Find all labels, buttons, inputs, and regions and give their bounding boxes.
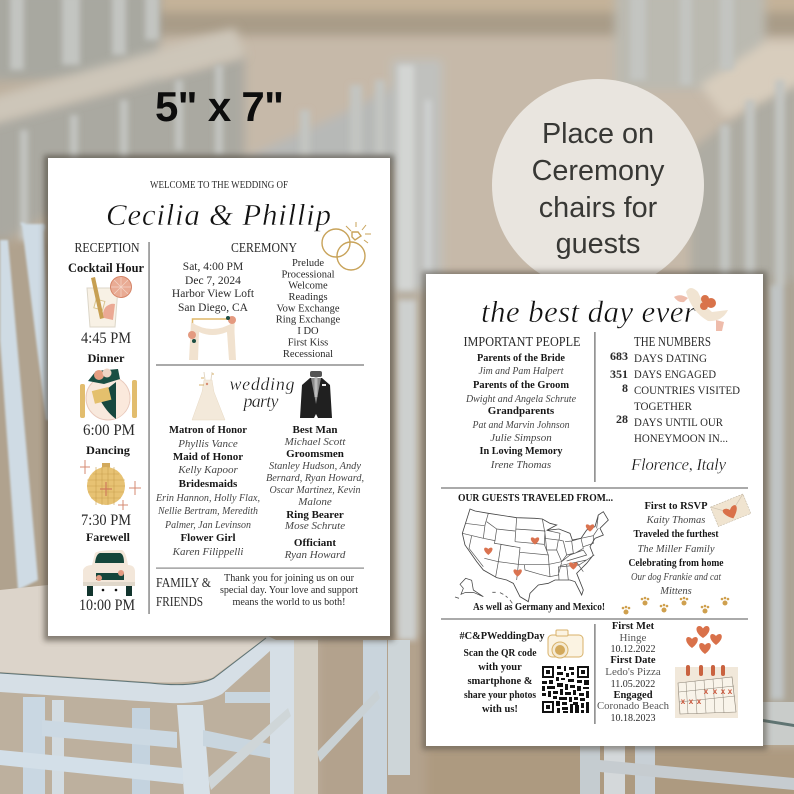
column: ceremony: Vow Exchange [276,304,340,314]
section: photo sharing [460,630,590,715]
icon: hearts and calendar: x [697,697,702,706]
column: ceremony: CEREMONY [231,241,297,256]
icon: camera [548,630,583,658]
callout: place on ceremony chairs: Ceremony [532,155,665,187]
column: love story dates: Hinge [620,632,647,644]
icon: getaway car [83,550,135,596]
QR code [541,665,590,714]
column: love story dates: 10.12.2022 [610,644,656,655]
divider [156,568,364,569]
section: wedding party: Nellie Bertram, Meredith [157,505,258,517]
icon: hearts and calendar: x [704,687,709,696]
column: love story dates: Coronado Beach [597,700,669,712]
column: important people [464,335,580,471]
couple names in script: Cecilia & Phillip [106,197,331,232]
column: the numbers: HONEYMOON IN... [634,431,728,445]
section: wedding party: Ring Bearer [286,509,344,521]
column: ceremony: Harbor View Loft [172,288,255,300]
section: wedding party [155,371,364,561]
icon: envelope [710,494,751,527]
section: wedding party: Officiant [294,537,336,549]
section: wedding party: Bridesmaids [179,478,238,490]
divider [441,618,748,620]
icon: dinner plate [80,368,137,420]
section: guest superlatives: Mittens [659,586,692,597]
column: reception timeline: 4:45 PM [81,330,131,347]
column: the numbers: DAYS DATING [634,351,707,365]
icon: tuxedo [300,371,332,418]
section: wedding party: Bernard, Ryan Howard, [266,472,364,484]
section: photo sharing: Scan the QR code [464,648,537,659]
column: ceremony: Prelude [292,258,324,269]
column: the numbers: 351 [610,367,628,381]
column: ceremony: Processional [281,270,335,280]
section: wedding party: Kelly Kapoor [177,464,239,476]
column: love story dates [597,621,669,724]
section: guest superlatives: Our dog Frankie and cat [631,572,722,583]
section: guest superlatives: Kaity Thomas [646,515,705,526]
icon: hearts and calendar [675,626,738,718]
column: love story dates: 11.05.2022 [611,679,655,690]
section: guests map [455,493,613,613]
column: ceremony: Recessional [283,349,333,360]
welcome line: WELCOME TO THE WEDDING OF [150,180,288,191]
column: reception timeline: Farewell [86,530,131,544]
section: wedding party: Best Man [293,424,337,436]
section: guest superlatives: Celebrating from home [628,558,724,569]
column: love story dates: Engaged [613,690,653,701]
section: wedding party: party [242,391,278,411]
section: family and friends: FAMILY & [156,576,211,591]
icon: wedding arch [188,316,236,360]
section: family and friends [156,573,358,610]
section: wedding party: Stanley Hudson, Andy [269,460,361,472]
section: family and friends: FRIENDS [156,595,203,610]
callout: place on ceremony chairs: chairs for [539,192,658,224]
section: wedding party: Oscar Martinez, Kevin [270,484,361,496]
section: photo sharing: smartphone & [467,676,533,687]
column: ceremony: San Diego, CA [178,302,249,314]
section: wedding party: Ryan Howard [284,549,346,561]
icon: hearts and calendar: x [713,687,718,696]
vertical divider [594,624,596,724]
column: ceremony: Welcome [288,280,328,292]
column: the numbers: TOGETHER [634,399,692,413]
column: love story dates: Ledo's Pizza [605,666,661,678]
column: the numbers: DAYS UNTIL OUR [634,415,723,429]
section: guest superlatives: Traveled the furthest [634,529,719,540]
panel: left program card [44,155,394,641]
column: ceremony: Ring Exchange [276,314,341,326]
divider [156,364,364,366]
section: photo sharing: with your [478,662,522,673]
section: family and friends: Thank you for joining us on our [224,573,354,584]
column: important people: Julie Simpson [490,432,552,444]
callout: place on ceremony chairs [492,79,704,291]
icons: paw prints [622,597,729,614]
column: the numbers: DAYS ENGAGED [634,367,716,381]
column: important people: Pat and Marvin Johnson [472,419,570,431]
icon: hearts and calendar: x [689,697,694,706]
section: wedding party: Phyllis Vance [177,438,238,450]
column: important people: In Loving Memory [480,445,563,457]
column: ceremony [172,222,371,360]
script: destination: Florence, Italy [630,455,726,474]
script: wedding party: wedding [230,374,294,394]
section: wedding party: Mose Schrute [284,520,345,532]
column: ceremony: First Kiss [288,338,328,348]
column: important people: Jim and Pam Halpert [478,365,564,377]
section: photo sharing: with us! [482,704,518,715]
section: guest superlatives [622,494,751,614]
column: love story dates: First Met [612,621,655,632]
callout: place on ceremony chairs: Place on [542,118,654,150]
section: photo sharing: #C&PWeddingDay [460,630,545,642]
section: family and friends: special day. Your love and support [220,585,358,596]
column: the numbers: 683 [610,349,628,363]
section: wedding party: Palmer, Jan Levinson [164,519,251,531]
section: wedding party: Maid of Honor [173,451,243,463]
column: love story dates: First Date [610,655,656,666]
column: the numbers [610,335,740,474]
section: guests map: OUR GUESTS TRAVELED FROM... [458,493,613,504]
icon: cocktail [87,276,132,327]
column: reception timeline: 10:00 PM [79,597,135,614]
section: wedding party: Matron of Honor [169,424,247,436]
section: wedding party: Karen Filippelli [172,546,243,558]
script title: the best day ever [481,294,697,329]
section: guests map: As well as Germany and Mexico! [473,602,605,613]
divider [148,242,150,614]
section: wedding party: Michael Scott [284,436,346,448]
column: love story dates: 10.18.2023 [610,713,656,724]
column: ceremony: Dec 7, 2024 [185,275,241,287]
icon: hearts and calendar: x [721,687,726,696]
section: wedding party: Groomsmen [286,448,344,460]
chart: US map with heart markers [455,509,608,603]
section: guest superlatives: The Miller Family [638,544,715,555]
section: guest superlatives: First to RSVP [644,501,708,512]
column: important people: Parents of the Groom [473,379,569,391]
foreground chair seat and legs [0,585,794,794]
heading: card size: 5" x 7" [155,83,284,130]
divider [441,488,748,489]
column: the numbers: 8 [622,381,628,395]
icon: hearts and calendar: x [728,687,733,696]
section: photo sharing: share your photos [464,690,536,701]
column: important people: Parents of the Bride [477,352,565,364]
icon: hearts and calendar: x [681,697,686,706]
section: family and friends: means the world to us both! [232,597,346,608]
column: reception timeline: Dinner [88,351,125,365]
vertical divider [594,332,596,482]
icon: wedding dress [192,372,225,420]
icon: doves [674,288,728,331]
section: wedding party: Flower Girl [180,532,236,544]
column: important people: Grandparents [488,405,555,417]
column: the numbers: 28 [616,412,628,426]
column: important people: Dwight and Angela Schrute [465,393,576,405]
column: important people: IMPORTANT PEOPLE [464,335,580,350]
icon: disco ball [80,460,141,510]
callout: place on ceremony chairs: guests [556,228,640,260]
column: reception timeline: RECEPTION [74,241,140,256]
column: reception timeline: 6:00 PM [83,422,135,439]
section: wedding party: Malone [297,496,332,508]
column: reception timeline: 7:30 PM [81,512,131,529]
column: important people: Irene Thomas [490,459,551,471]
column: reception timeline: Dancing [86,443,130,457]
column: the numbers: COUNTRIES VISITED [634,383,740,397]
column: ceremony: Readings [288,292,328,303]
column: ceremony: Sat, 4:00 PM [183,261,243,273]
column: ceremony: I DO [297,326,319,337]
panel: right program card [422,271,767,750]
column: reception timeline [68,241,144,614]
section: wedding party: Erin Hannon, Holly Flax, [155,492,260,504]
column: the numbers: THE NUMBERS [634,335,711,350]
icon: wedding rings [322,222,371,270]
column: reception timeline: Cocktail Hour [68,261,144,275]
